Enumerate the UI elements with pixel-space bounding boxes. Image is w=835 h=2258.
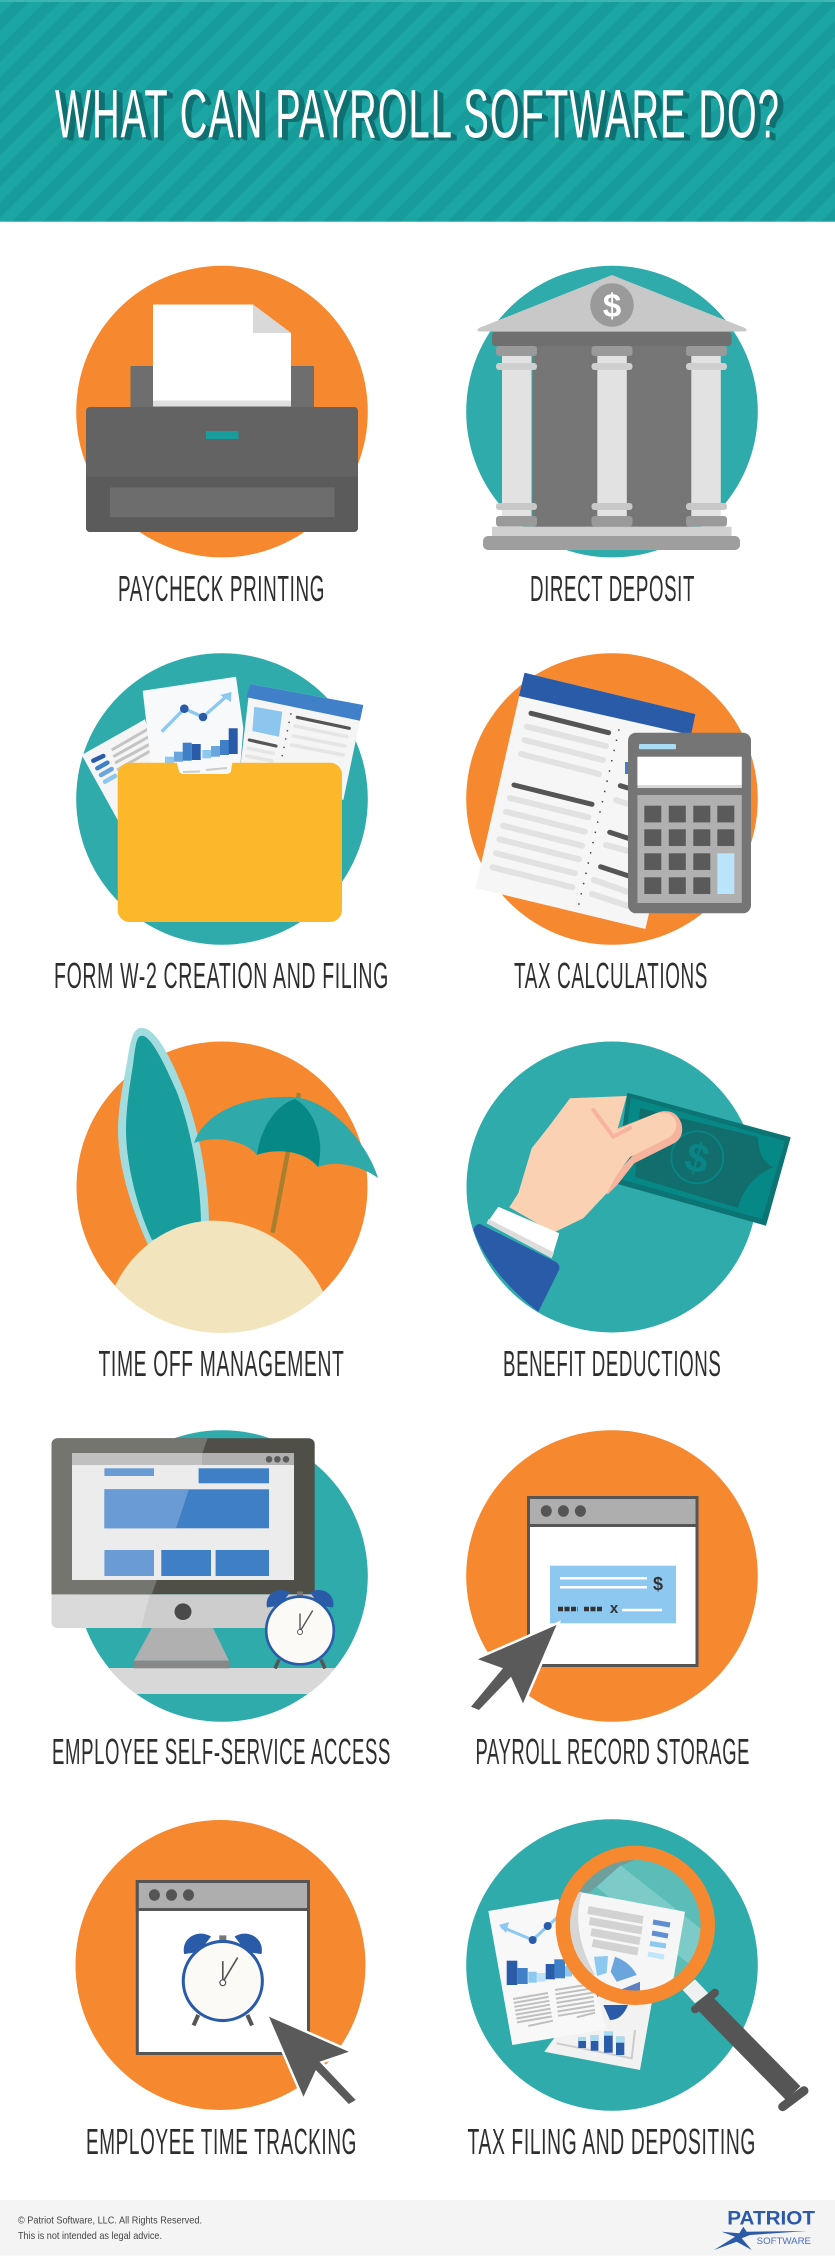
icon: beach umbrella	[194, 1093, 378, 1233]
icon: tax document	[476, 673, 695, 929]
icon: surfboard	[118, 1028, 209, 1245]
icon: dollar bill	[615, 1093, 791, 1226]
logo: Patriot Software: SOFTWARE	[757, 2236, 811, 2247]
logo: Patriot Software	[714, 2208, 815, 2250]
legal disclaimer: This is not intended as legal advice.	[18, 2230, 162, 2242]
panel: tax calculations	[466, 653, 758, 996]
panel: tax filing and depositing	[466, 1819, 804, 2162]
label: EMPLOYEE SELF-SERVICE ACCESS	[52, 1731, 391, 1772]
panel: benefit deductions	[466, 1042, 791, 1384]
header banner	[0, 0, 835, 222]
logo: Patriot Software: PATRIOT	[727, 2208, 815, 2230]
label: FORM W-2 CREATION AND FILING	[54, 955, 389, 996]
icon: printer	[86, 304, 358, 532]
panel: paycheck printing	[76, 266, 368, 609]
footer bar	[0, 2200, 835, 2256]
icon: browser window	[137, 1882, 308, 2054]
icon: magnifying glass	[563, 1853, 804, 2107]
icon: front report page	[488, 1899, 606, 2045]
icon: desktop monitor	[52, 1438, 315, 1668]
panel: payroll record storage	[466, 1430, 758, 1772]
icon: shirt cuff and sleeve	[473, 1207, 559, 1312]
desk	[108, 1668, 336, 1694]
label: EMPLOYEE TIME TRACKING	[86, 2121, 357, 2162]
icon: browser window	[528, 1498, 697, 1666]
icon: check: $	[653, 1574, 663, 1594]
icon: mouse cursor	[269, 2017, 356, 2104]
panel: time off management	[76, 1028, 378, 1384]
icon: bank building: $	[603, 287, 621, 324]
icon: calculator	[628, 733, 751, 913]
icon: check: x	[610, 1600, 619, 1617]
panel: employee time tracking	[76, 1820, 366, 2162]
icon: bank building	[477, 275, 747, 550]
copyright text: © Patriot Software, LLC. All Rights Reserved.	[18, 2214, 202, 2226]
icon: alarm clock	[266, 1590, 334, 1668]
panel: form w-2	[54, 653, 389, 996]
label: TIME OFF MANAGEMENT	[98, 1343, 344, 1384]
icon: back report page	[544, 1995, 652, 2070]
icon: sand mound	[115, 1220, 323, 1333]
icon: hand	[509, 1096, 681, 1233]
icon: alarm clock	[183, 1934, 262, 2025]
icon: check	[550, 1566, 676, 1623]
panel: direct deposit	[466, 266, 758, 609]
panel: employee self-service access	[52, 1430, 391, 1772]
label: PAYCHECK PRINTING	[118, 568, 325, 609]
icon: mouse cursor	[471, 1625, 556, 1710]
icon: folder with papers	[82, 677, 363, 922]
icon: dollar bill: $	[680, 1133, 714, 1183]
